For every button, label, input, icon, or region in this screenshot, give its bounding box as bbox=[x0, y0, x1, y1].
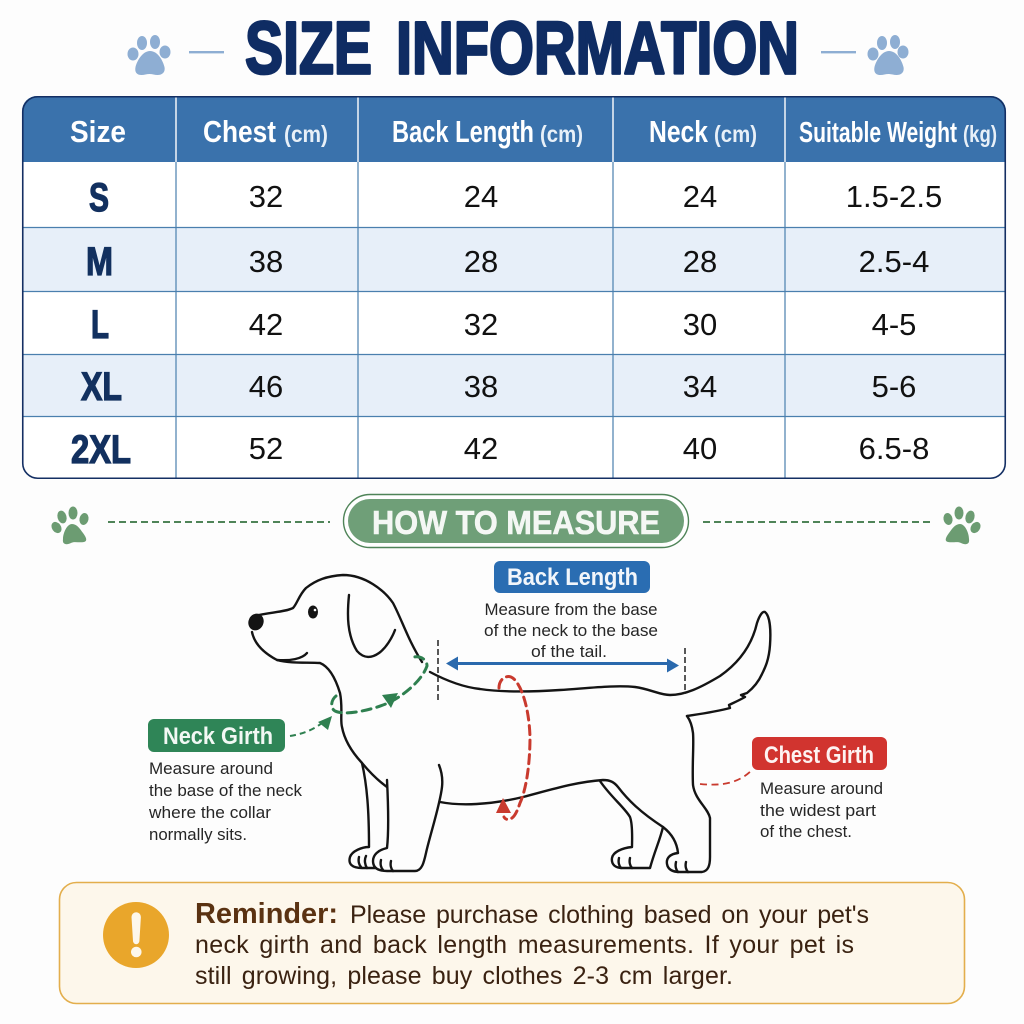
row M bbox=[86, 240, 929, 284]
row M: 28 bbox=[683, 244, 717, 279]
dog outline illustration bbox=[246, 575, 770, 872]
row XL: 34 bbox=[683, 369, 717, 404]
mouth bbox=[277, 653, 307, 660]
table header row: Neck bbox=[649, 114, 709, 149]
row S bbox=[89, 176, 942, 220]
left green dashed rule bbox=[108, 521, 330, 523]
neck girth label: Neck Girth bbox=[163, 723, 273, 750]
row 2XL: 52 bbox=[249, 431, 283, 466]
right green dashed rule bbox=[703, 521, 930, 523]
neck girth dashed loop bbox=[332, 657, 427, 713]
row 2XL: 6.5-8 bbox=[859, 431, 929, 466]
row S: 1.5-2.5 bbox=[846, 179, 942, 214]
right title rule bbox=[821, 51, 856, 53]
table header row: (cm) bbox=[714, 121, 757, 147]
row 2XL: 2XL bbox=[71, 428, 131, 472]
row L: 32 bbox=[464, 307, 498, 342]
icon: left blue paw bbox=[128, 35, 170, 75]
table header row: Chest bbox=[203, 114, 276, 149]
back length description: of the tail. bbox=[531, 642, 607, 661]
back length neck marker bbox=[437, 640, 439, 702]
icon: exclamation bbox=[103, 902, 169, 968]
back leg bbox=[600, 781, 663, 868]
row XL: 46 bbox=[249, 369, 283, 404]
row S: 24 bbox=[683, 179, 717, 214]
back length description bbox=[484, 600, 658, 661]
row M: M bbox=[86, 240, 113, 284]
tail and back line bbox=[430, 612, 770, 716]
how to measure pill: HOW TO MEASURE bbox=[372, 504, 660, 541]
table header row: (cm) bbox=[284, 121, 328, 147]
row 2XL: 42 bbox=[464, 431, 498, 466]
neck girth pointer arrow bbox=[290, 716, 332, 736]
ear bbox=[348, 595, 395, 657]
reminder text: Reminder: bbox=[195, 898, 338, 930]
table header row: Suitable Weight bbox=[799, 117, 957, 149]
row 2XL bbox=[71, 428, 929, 472]
row L: 30 bbox=[683, 307, 717, 342]
neck girth description: normally sits. bbox=[149, 825, 247, 844]
chest girth label: Chest Girth bbox=[764, 742, 874, 769]
row M: 38 bbox=[249, 244, 283, 279]
nose bbox=[246, 611, 266, 633]
title: INFORMATION bbox=[396, 6, 799, 90]
reminder text bbox=[195, 898, 869, 990]
row XL: XL bbox=[81, 365, 122, 409]
front legs bbox=[350, 763, 442, 871]
icon: right green paw bbox=[942, 506, 983, 544]
neck girth description: Measure around bbox=[149, 759, 273, 778]
row XL: 5-6 bbox=[872, 369, 916, 404]
row L: 4-5 bbox=[872, 307, 916, 342]
back length label: Back Length bbox=[507, 564, 638, 591]
neck girth description: the base of the neck bbox=[149, 781, 302, 800]
back length tail marker bbox=[684, 648, 686, 694]
reminder text: Please purchase clothing based on your pet's bbox=[350, 901, 869, 929]
table header row bbox=[70, 114, 997, 149]
back length arrow bbox=[446, 656, 679, 672]
icon: right blue paw bbox=[868, 35, 908, 75]
chest girth description: of the chest. bbox=[760, 822, 852, 841]
row S: S bbox=[89, 176, 109, 220]
table header row: Size bbox=[70, 114, 126, 149]
belly line bbox=[440, 716, 710, 872]
reminder text: neck girth and back length measurements. If your pet is bbox=[195, 931, 854, 959]
reminder panel bbox=[60, 882, 964, 1004]
row L: 42 bbox=[249, 307, 283, 342]
table header row: (kg) bbox=[963, 121, 997, 147]
back length description: of the neck to the base bbox=[484, 621, 658, 640]
neck girth description bbox=[148, 759, 302, 844]
chest girth description: Measure around bbox=[760, 779, 883, 798]
row S: 32 bbox=[249, 179, 283, 214]
row S: 24 bbox=[464, 179, 498, 214]
left title rule bbox=[189, 51, 224, 53]
back length description: Measure from the base bbox=[484, 600, 658, 619]
reminder text: still growing, please buy clothes 2-3 cm larger. bbox=[195, 962, 733, 990]
neck girth description: where the collar bbox=[148, 803, 271, 822]
table header row: Back Length bbox=[392, 114, 534, 149]
row M: 2.5-4 bbox=[859, 244, 929, 279]
chest girth description bbox=[760, 779, 883, 841]
size table bbox=[22, 96, 1006, 479]
row L: L bbox=[91, 303, 109, 347]
row XL: 38 bbox=[464, 369, 498, 404]
row XL bbox=[81, 365, 916, 409]
eye bbox=[308, 606, 318, 618]
head, chest and front outline bbox=[252, 575, 422, 787]
row 2XL: 40 bbox=[683, 431, 717, 466]
title: SIZE bbox=[245, 6, 372, 90]
how to measure pill bbox=[344, 494, 688, 548]
row M: 28 bbox=[464, 244, 498, 279]
chest girth pointer bbox=[700, 770, 752, 785]
icon: left green paw bbox=[49, 506, 90, 544]
title bbox=[245, 6, 799, 90]
row L bbox=[91, 303, 916, 347]
chest girth dashed loop bbox=[496, 677, 530, 819]
chest girth description: the widest part bbox=[760, 801, 876, 820]
table header row: (cm) bbox=[540, 121, 583, 147]
